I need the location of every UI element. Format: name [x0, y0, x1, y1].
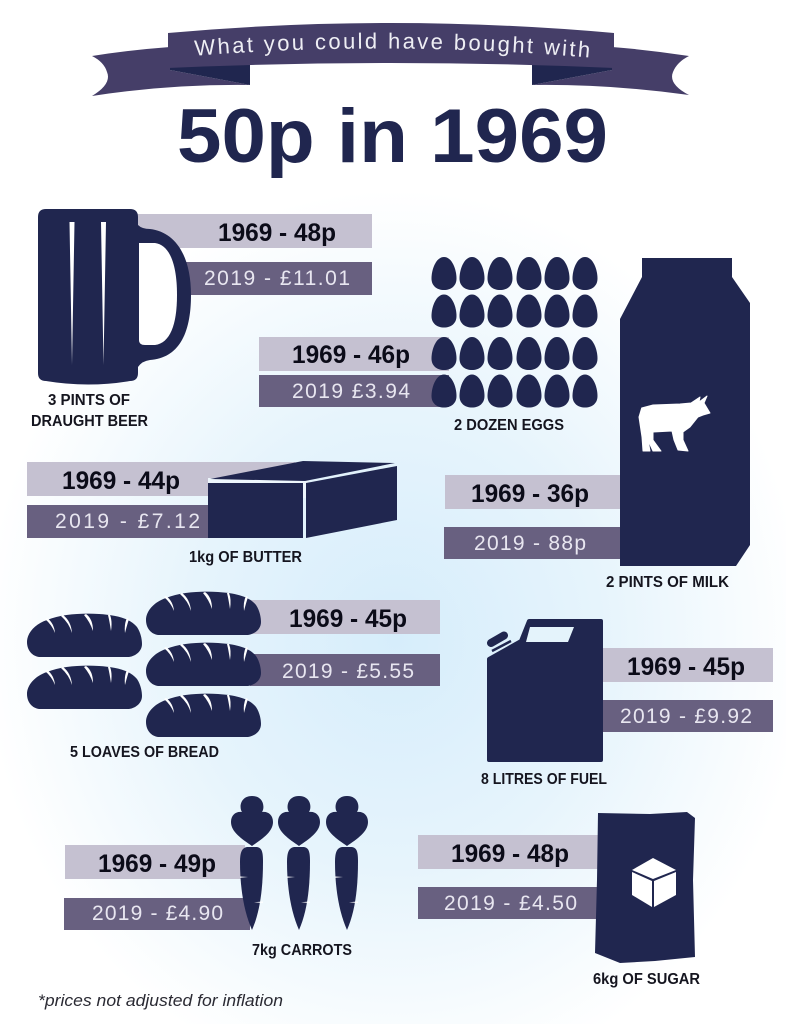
value 1969 fuel: 1969 - 45p	[627, 653, 745, 681]
value 1969 bread: 1969 - 45p	[289, 605, 407, 633]
price bar 1969 bread	[250, 600, 440, 634]
icon: sugar cube	[632, 858, 676, 907]
value 1969 butter: 1969 - 44p	[62, 467, 180, 495]
price bar 2019 milk	[444, 527, 624, 559]
price bar 1969 fuel	[595, 648, 773, 682]
label beer: DRAUGHT BEER	[31, 413, 148, 430]
price bar 2019 sugar	[418, 887, 603, 919]
panel: fuel	[481, 621, 773, 788]
label sugar: 6kg OF SUGAR	[593, 971, 700, 988]
value 2019 sugar: 2019 - £4.50	[444, 892, 577, 915]
icon: butter block	[208, 461, 397, 538]
value 1969 beer: 1969 - 48p	[218, 219, 336, 247]
price bar 2019 butter	[27, 505, 212, 538]
price bar 1969 carrots	[65, 845, 245, 879]
panel: butter	[27, 461, 397, 566]
footnote: *prices not adjusted for inflation	[38, 991, 283, 1010]
banner ribbon	[92, 23, 689, 96]
icon: jerry can	[489, 621, 601, 760]
value 2019 milk: 2019 - 88p	[474, 532, 586, 555]
panel: beer	[31, 209, 372, 430]
price bar 1969 eggs	[259, 337, 449, 371]
price bar 2019 bread	[250, 654, 440, 686]
value 2019 eggs: 2019 £3.94	[292, 380, 410, 403]
value 1969 milk: 1969 - 36p	[471, 480, 589, 508]
icon: cow	[639, 396, 710, 451]
value 1969 sugar: 1969 - 48p	[451, 840, 569, 868]
value 2019 fuel: 2019 - £9.92	[620, 705, 752, 728]
label fuel: 8 LITRES OF FUEL	[481, 771, 607, 788]
value 2019 beer: 2019 - £11.01	[204, 267, 350, 290]
panel: bread	[27, 592, 440, 761]
label butter: 1kg OF BUTTER	[189, 549, 302, 566]
value 2019 butter: 2019 - £7.12	[55, 510, 200, 533]
banner text: What you could have bought with	[194, 32, 589, 58]
value 1969 carrots: 1969 - 49p	[98, 850, 216, 878]
icon: eggs grid	[432, 257, 598, 408]
panel: carrots	[64, 796, 368, 959]
title: 50p in 1969	[177, 94, 608, 179]
price bar 1969 milk	[445, 475, 625, 509]
price bar 2019 carrots	[64, 898, 250, 930]
value 2019 bread: 2019 - £5.55	[282, 660, 414, 683]
panel: milk	[444, 258, 750, 591]
icon: bread loaves	[27, 592, 261, 737]
label eggs: 2 DOZEN EGGS	[454, 417, 564, 434]
icon: carrots	[231, 796, 368, 930]
value 2019 carrots: 2019 - £4.90	[92, 902, 223, 925]
value 1969 eggs: 1969 - 46p	[292, 341, 410, 369]
label bread: 5 LOAVES OF BREAD	[70, 744, 219, 761]
panel: sugar	[418, 812, 700, 988]
label beer: 3 PINTS OF	[48, 392, 130, 409]
price bar 2019 beer	[185, 262, 372, 295]
icon: sugar bag	[595, 812, 695, 963]
price bar 1969 butter	[27, 462, 295, 496]
price bar 2019 fuel	[595, 700, 773, 732]
icon: milk carton	[620, 258, 750, 566]
label milk: 2 PINTS OF MILK	[606, 574, 729, 591]
panel: eggs	[259, 257, 598, 434]
price bar 1969 beer	[130, 214, 372, 248]
label beer	[31, 392, 148, 430]
price bar 2019 eggs	[259, 375, 449, 407]
icon: beer mug	[38, 209, 191, 384]
label carrots: 7kg CARROTS	[252, 942, 352, 959]
price bar 1969 sugar	[418, 835, 603, 869]
